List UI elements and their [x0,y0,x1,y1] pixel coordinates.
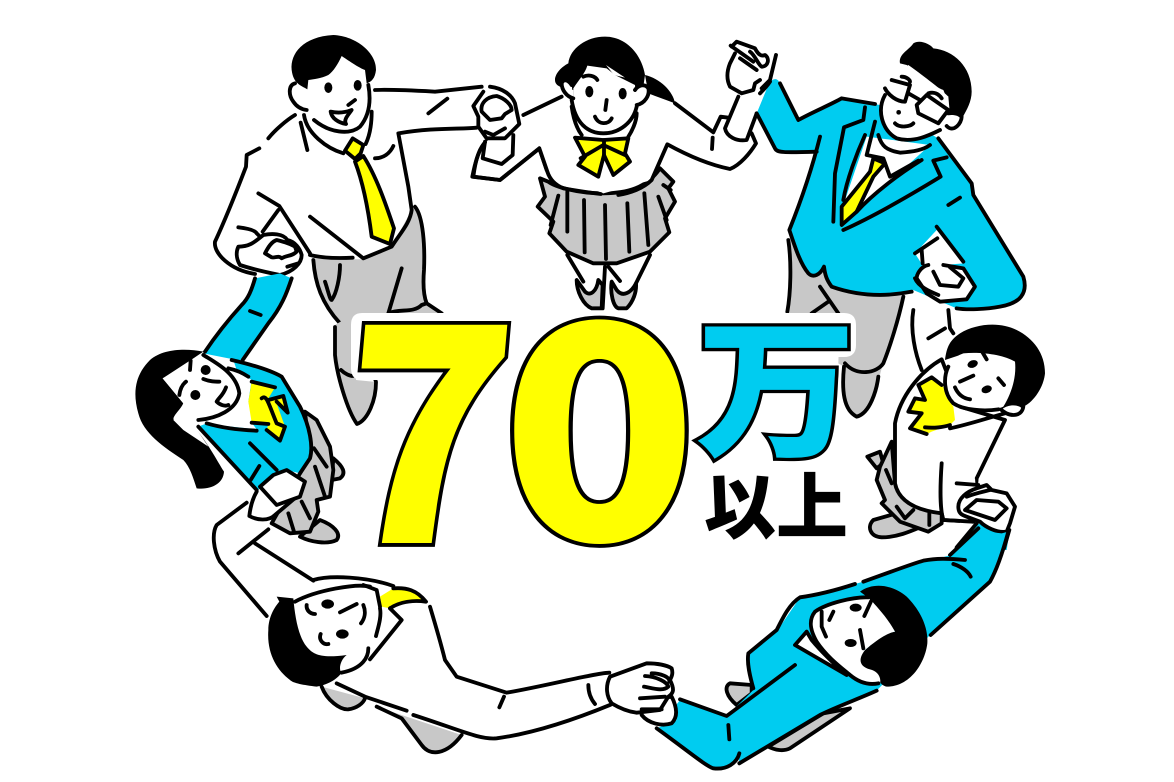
person: man in blue jacket, bottom right [657,528,1008,769]
clasped hands [249,492,297,520]
skirt [538,168,675,263]
hand holding blue sleeve [237,234,302,275]
person: schoolgirl in blue sweater, left [135,273,343,542]
person: man in white shirt, top left [215,35,547,328]
bow [575,138,630,177]
shirt and tie [840,137,930,227]
necktie [380,588,426,608]
unit: 以上: 以上 [704,449,848,554]
person: boy with yellow bow, right [867,310,1045,550]
clasped hands, bottom centre [607,663,676,725]
unit: 万: 万 [696,271,856,488]
digit 7: 7 [325,204,531,628]
bow [248,382,288,441]
sleeve [203,273,292,361]
lower leg of top-left man [335,313,376,424]
necktie [355,156,394,244]
bow [908,377,955,435]
head [945,325,1045,408]
trousers [727,683,752,705]
torso [895,359,1005,522]
pigtail [645,75,675,103]
jacket [757,79,1025,309]
hair [555,37,645,102]
body [313,581,611,738]
raised hand [725,97,757,140]
raised arm [912,310,953,370]
sweater [198,360,311,490]
trousers [787,240,903,417]
person: man in white shirt with tie, bottom left [214,503,611,752]
glasses [885,77,948,126]
collar [795,632,847,675]
trousers [322,687,365,709]
headline number: 70 [325,202,698,628]
hair [268,597,347,687]
hair [292,35,376,89]
jacket [657,528,1008,769]
clasped hands [955,523,1010,550]
legs and shoes [577,280,603,308]
hair [900,42,972,116]
hair [135,350,224,489]
tucked hand [915,230,963,267]
skirt and shoes [332,458,343,480]
person: schoolgirl with yellow bow, top centre [472,37,776,308]
skirt and shoes [867,452,883,468]
white backing behind headline [351,313,856,380]
hair [859,586,927,687]
fist [473,142,547,180]
person: man in blue suit with glasses, top right [757,42,1025,417]
digit 0: 0 [501,202,698,624]
